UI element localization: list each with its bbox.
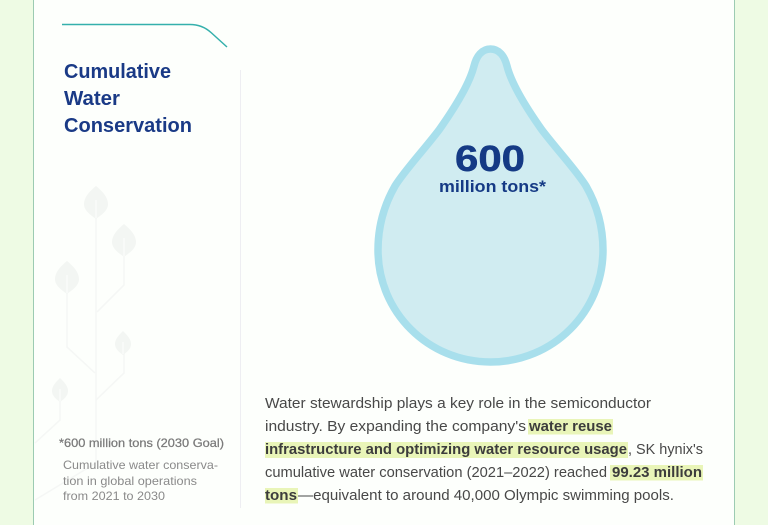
title: Water — [64, 88, 120, 110]
body text with highlights: infrastructure and optimizing water resource usage — [265, 442, 627, 458]
body text with highlights: water reuse — [528, 419, 612, 435]
title — [64, 61, 192, 137]
footnote: Cumulative water conserva- — [63, 458, 218, 472]
body text with highlights: cumulative water conservation (2021–2022) reached — [265, 465, 607, 481]
body text with highlights: tons — [265, 488, 297, 504]
body text with highlights: industry. By expanding the company's — [265, 419, 526, 435]
footnote — [59, 436, 224, 503]
body text with highlights: —equivalent to around 40,000 Olympic swimming pools. — [298, 488, 674, 504]
drop value — [439, 138, 546, 196]
footnote: tion in global operations — [63, 474, 197, 488]
icon: faint plant illustration — [35, 186, 136, 500]
title: Cumulative — [64, 61, 171, 83]
icon: water drop — [378, 49, 603, 362]
body text with highlights — [265, 396, 703, 504]
accent line — [62, 24, 227, 47]
title: Conservation — [64, 115, 192, 137]
drop value: 600 — [455, 138, 525, 179]
body text with highlights: 99.23 million — [612, 465, 702, 481]
drop value: million tons* — [439, 177, 546, 196]
body text with highlights: Water stewardship plays a key role in the semiconductor — [265, 396, 651, 412]
footnote: *600 million tons (2030 Goal) — [59, 436, 224, 450]
body text with highlights: , SK hynix's — [628, 442, 703, 458]
footnote: from 2021 to 2030 — [63, 489, 165, 503]
